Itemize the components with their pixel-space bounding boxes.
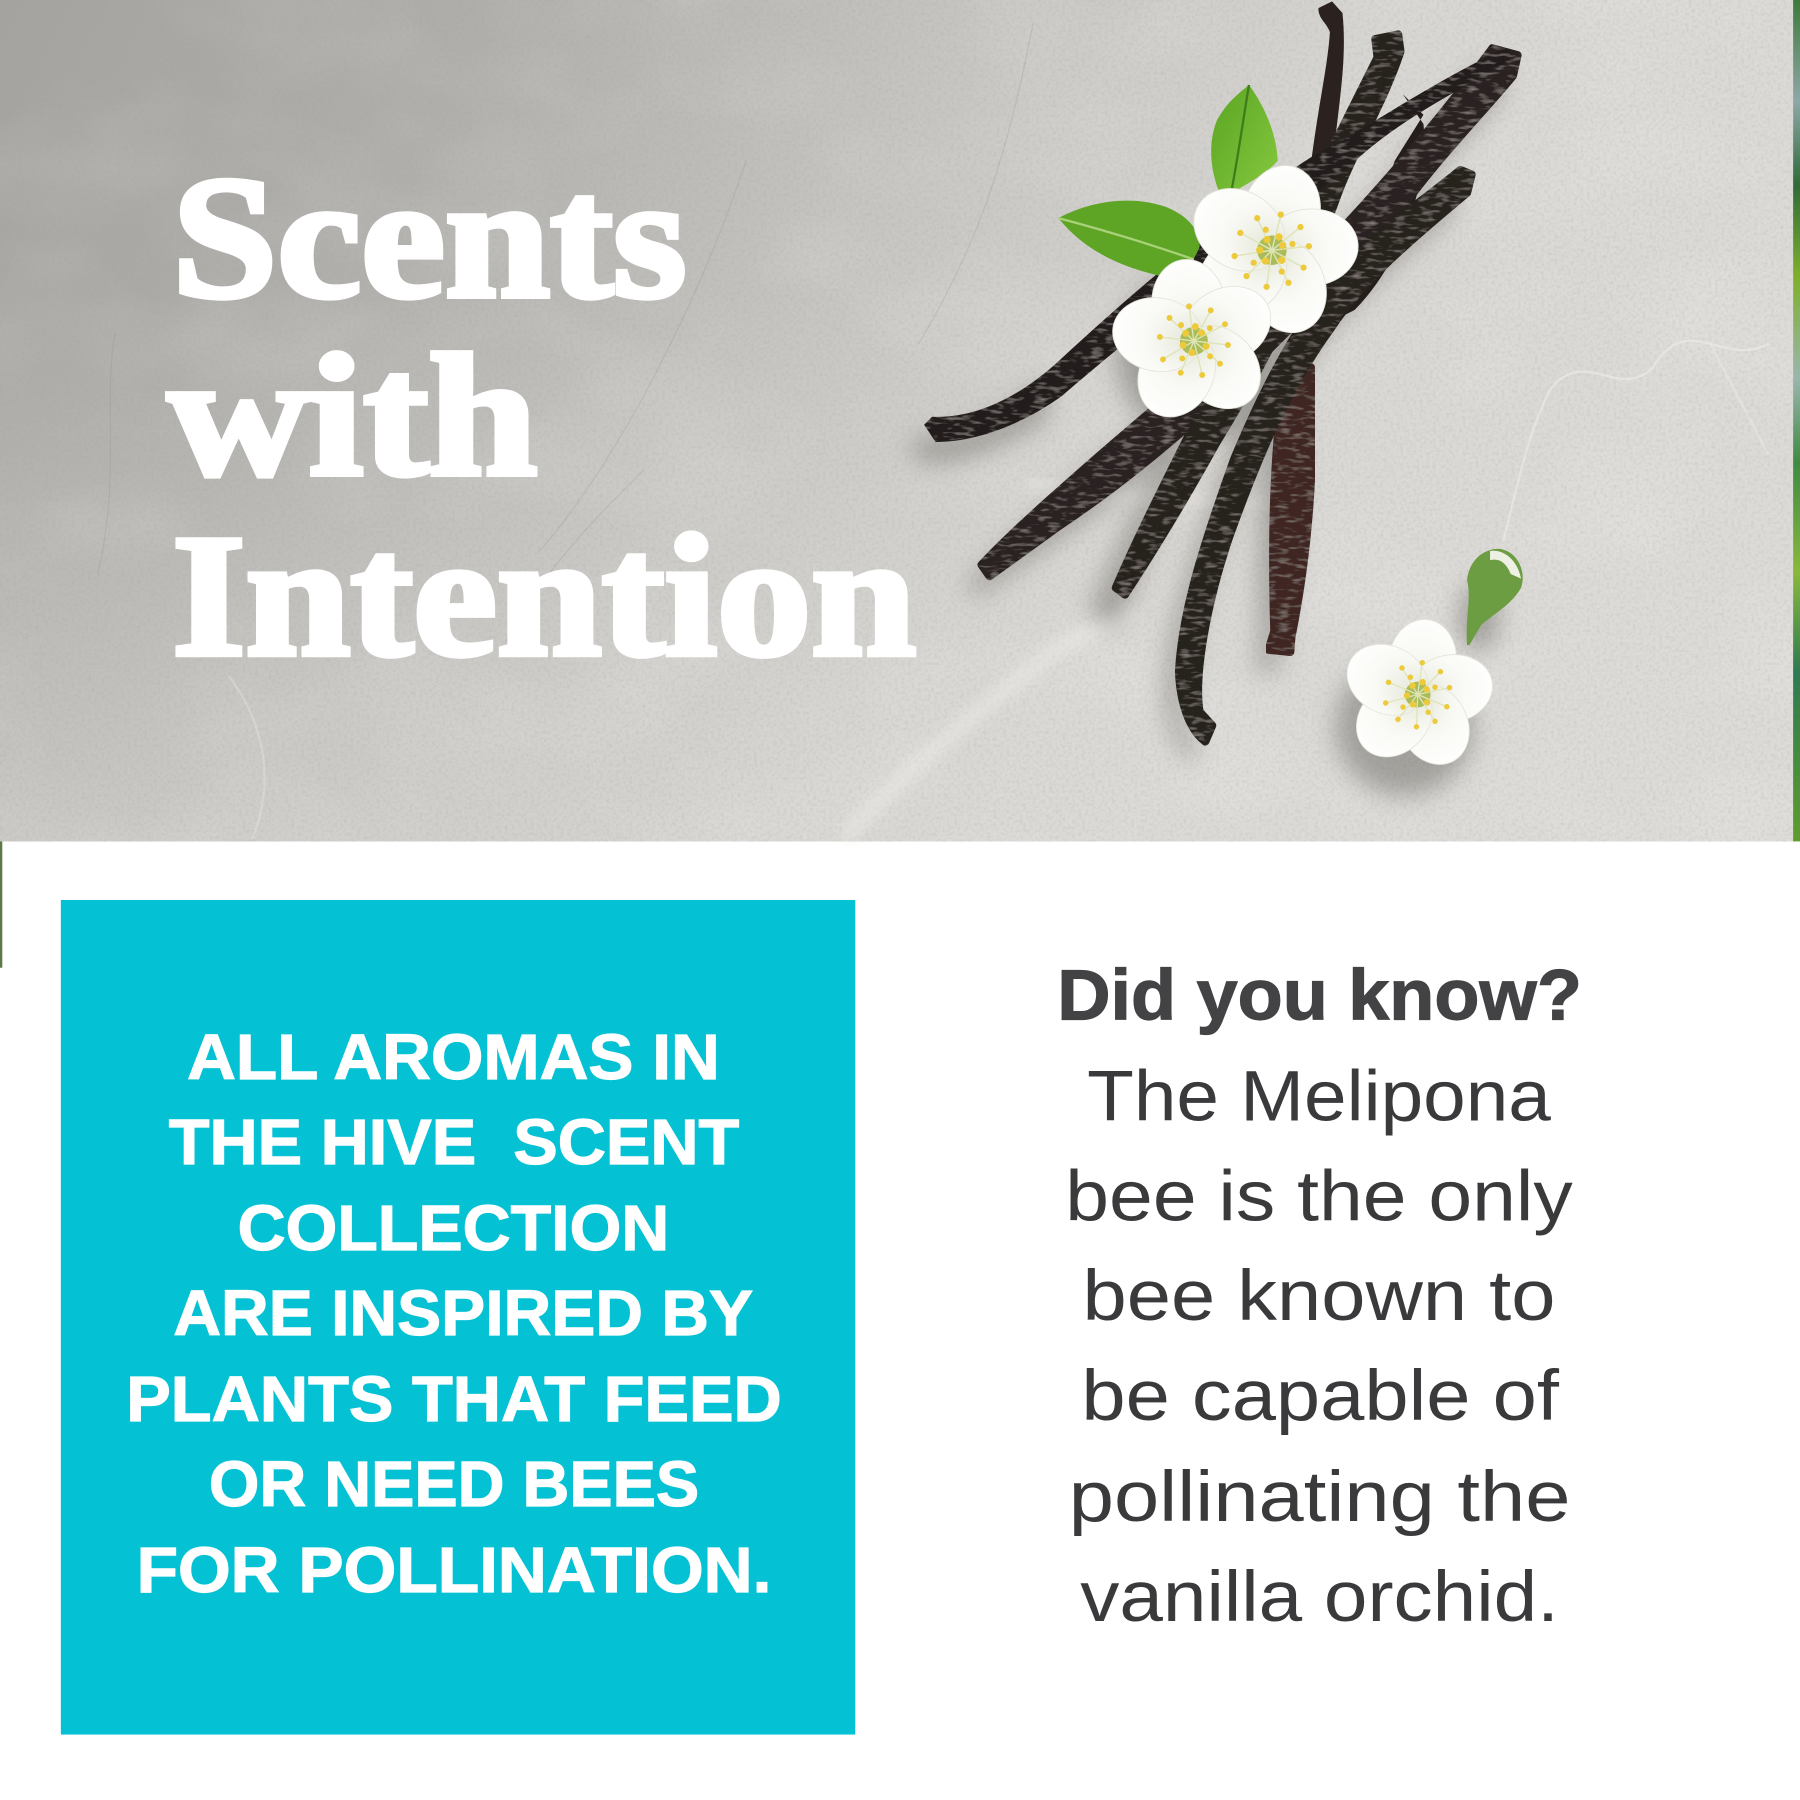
title: Intention: [172, 499, 916, 692]
flower: lower: [1325, 608, 1510, 786]
flower: middle: [1094, 247, 1295, 440]
body text: [1065, 1057, 1573, 1637]
callout text: PLANTS THAT FEED: [126, 1363, 782, 1435]
body text: bee known to: [1083, 1257, 1555, 1336]
pod: thin top: [1311, 3, 1342, 189]
body text: The Melipona: [1087, 1057, 1551, 1136]
vanilla pods and flowers: [910, 3, 1523, 796]
callout text: ARE INSPIRED BY: [173, 1277, 753, 1349]
leaf: left: [1058, 201, 1200, 278]
cast shadow: [910, 69, 1504, 796]
callout text: OR NEED BEES: [209, 1448, 699, 1520]
pod: brown: [1268, 367, 1312, 652]
title: Scents: [172, 141, 686, 334]
body text: pollinating the: [1069, 1458, 1570, 1537]
pod: middle: [1116, 34, 1401, 595]
bud: [1467, 549, 1523, 645]
panel: teal callout: [61, 900, 855, 1735]
leaf: upper: [1211, 85, 1278, 197]
left edge green strip: [0, 841, 2, 968]
pod: center cluster: [1286, 94, 1424, 344]
callout text: [126, 1021, 782, 1606]
body text: vanilla orchid.: [1080, 1558, 1559, 1637]
did you know text block: [1057, 956, 1582, 1637]
body text: bee is the only: [1065, 1157, 1573, 1236]
pod: long hooked: [1179, 170, 1472, 742]
pod: wide: [982, 48, 1518, 576]
callout text: ALL AROMAS IN: [187, 1021, 720, 1093]
pod: dark band: [924, 48, 1515, 442]
callout text: FOR POLLINATION.: [137, 1534, 771, 1606]
heading: did you know: Did you know?: [1057, 956, 1582, 1035]
hero photo: marble background: [0, 0, 1793, 841]
flower: upper: [1158, 144, 1384, 363]
right edge green strip: [1793, 0, 1800, 841]
title: [168, 141, 916, 692]
callout text: COLLECTION: [238, 1192, 669, 1264]
body text: be capable of: [1081, 1357, 1559, 1436]
callout text: THE HIVE SCENT: [169, 1106, 739, 1178]
title: with: [168, 319, 537, 512]
